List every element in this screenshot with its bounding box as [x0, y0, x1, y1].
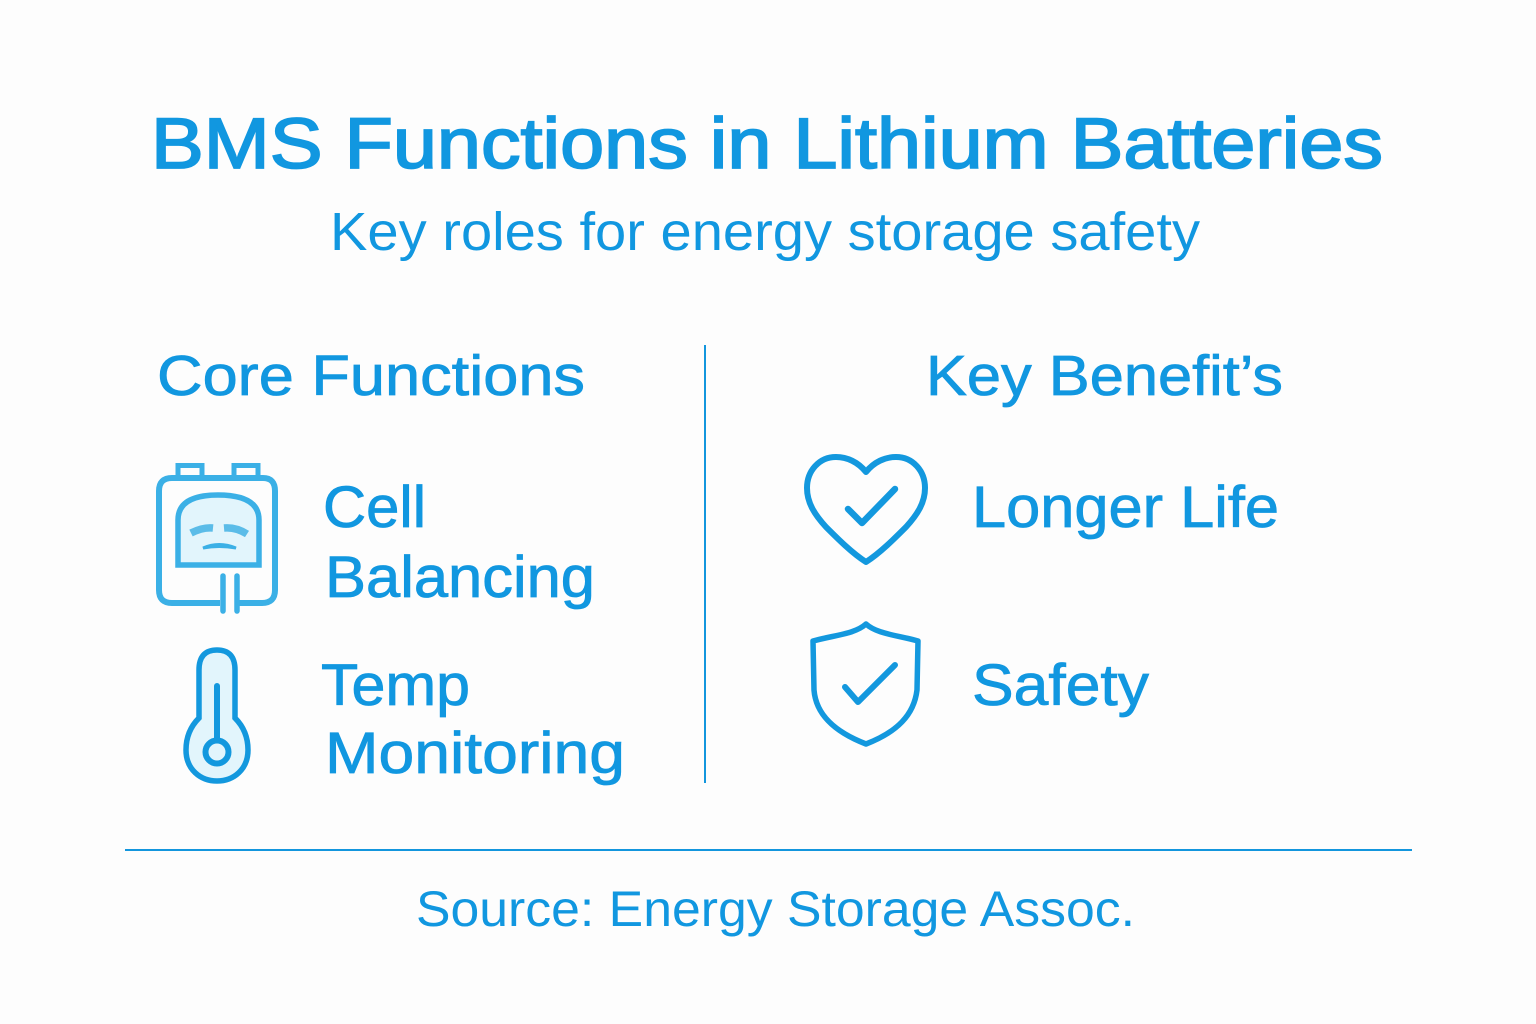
text: temp monitoring — [321, 653, 625, 786]
heading: key benefits: Key Benefit’s — [926, 344, 1283, 408]
subtitle: Key roles for energy storage safety — [330, 202, 1200, 262]
text: cell balancing — [323, 475, 595, 610]
text: temp monitoring: Monitoring — [325, 721, 625, 786]
icon: thermometer — [186, 650, 248, 781]
source note: Source: Energy Storage Assoc. — [416, 881, 1135, 937]
icon: battery cell — [159, 466, 275, 611]
footer divider — [125, 849, 1412, 851]
text: temp monitoring: Temp — [321, 653, 470, 718]
column divider — [704, 345, 706, 783]
text: cell balancing: Balancing — [325, 545, 595, 610]
text: longer life: Longer Life — [972, 475, 1279, 540]
title: BMS Functions in Lithium Batteries — [151, 105, 1383, 184]
text: safety: Safety — [972, 653, 1149, 718]
icon: shield with check — [813, 624, 918, 744]
heading: core functions: Core Functions — [157, 344, 585, 408]
icon: heart with check — [807, 457, 925, 562]
text: cell balancing: Cell — [323, 475, 426, 540]
